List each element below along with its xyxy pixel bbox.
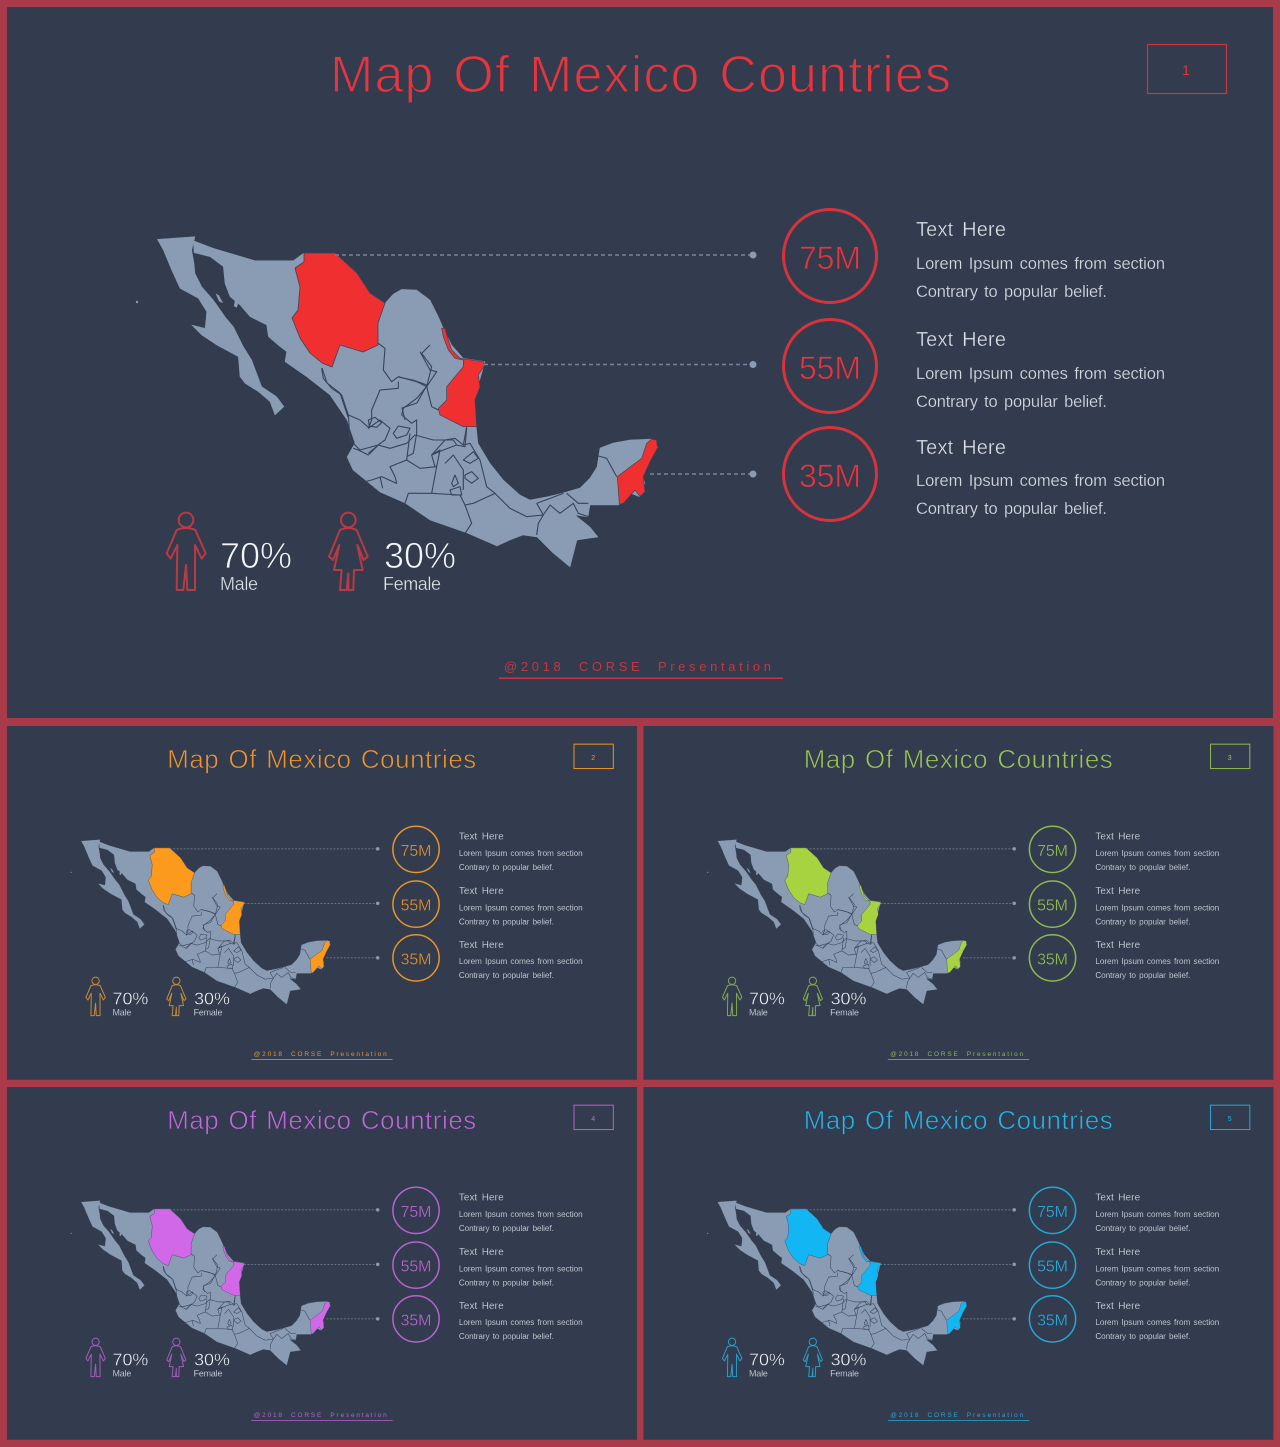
text block 1: Text Here bbox=[916, 219, 1006, 241]
stat 75M: 75M bbox=[1037, 1204, 1068, 1221]
stat 55M: 55M bbox=[799, 350, 861, 386]
panel: green slide bbox=[643, 726, 1273, 1080]
icon: female bbox=[167, 977, 186, 1016]
panel: orange slide bbox=[7, 726, 637, 1080]
female stat: Female bbox=[830, 1369, 859, 1379]
title: Map Of Mexico Countries bbox=[804, 746, 1113, 774]
panel: purple slide bbox=[7, 1087, 637, 1440]
male stat: Male bbox=[220, 574, 258, 594]
male stat bbox=[749, 1350, 785, 1379]
icon: female bbox=[803, 977, 822, 1016]
male stat: 70% bbox=[749, 989, 785, 1009]
female stat bbox=[194, 1350, 230, 1379]
stat 75M bbox=[1029, 826, 1076, 873]
stat 35M: 35M bbox=[799, 458, 861, 494]
map of Mexico bbox=[71, 840, 330, 1004]
text block 3: Text Here bbox=[1095, 1301, 1141, 1312]
slide number box: 1 bbox=[1182, 62, 1190, 78]
text block 3: Lorem Ipsum comes from section bbox=[1095, 957, 1220, 966]
stat 35M: 35M bbox=[401, 1312, 431, 1329]
female stat: Female bbox=[194, 1369, 222, 1379]
text block 3 bbox=[1095, 1301, 1220, 1341]
stat 35M bbox=[1029, 935, 1076, 981]
stat 75M: 75M bbox=[799, 240, 861, 276]
connector lines bbox=[170, 847, 379, 960]
slide number box: 2 bbox=[591, 755, 595, 762]
panel: main red slide bbox=[7, 7, 1273, 718]
text block 1 bbox=[916, 219, 1165, 301]
stat 55M bbox=[784, 320, 876, 412]
stat 35M bbox=[784, 428, 876, 520]
icon: female bbox=[167, 1338, 186, 1377]
male stat bbox=[220, 535, 292, 594]
text block 3 bbox=[459, 1301, 583, 1341]
text block 2: Text Here bbox=[459, 886, 504, 897]
text block 1 bbox=[459, 1192, 583, 1233]
text block 1 bbox=[1095, 1192, 1220, 1233]
icon: male bbox=[86, 1338, 105, 1377]
text block 3: Lorem Ipsum comes from section bbox=[459, 957, 583, 966]
male stat: 70% bbox=[112, 1350, 148, 1370]
male stat bbox=[112, 989, 148, 1018]
female stat bbox=[383, 535, 456, 594]
map of Mexico bbox=[707, 1201, 967, 1365]
text block 1 bbox=[459, 831, 583, 872]
text block 2: Lorem Ipsum comes from section bbox=[916, 365, 1165, 383]
text block 3: Contrary to popular belief. bbox=[459, 1332, 554, 1341]
female stat bbox=[194, 989, 230, 1018]
male stat bbox=[112, 1350, 148, 1379]
icon: female bbox=[329, 513, 368, 590]
slide number box bbox=[1211, 1105, 1250, 1130]
text block 3: Lorem Ipsum comes from section bbox=[1095, 1318, 1220, 1327]
text block 2: Text Here bbox=[916, 329, 1006, 351]
text block 2: Text Here bbox=[1095, 1247, 1141, 1258]
icon: male bbox=[722, 977, 742, 1016]
slide number box: 5 bbox=[1228, 1116, 1232, 1123]
map of Mexico bbox=[707, 840, 967, 1004]
male stat: 70% bbox=[749, 1350, 785, 1370]
slide number box bbox=[574, 1105, 613, 1130]
connector lines bbox=[806, 1208, 1016, 1321]
text block 3: Text Here bbox=[459, 940, 504, 951]
footer credit: @2018 CORSE Presentation bbox=[890, 1051, 1024, 1058]
text block 3: Text Here bbox=[459, 1301, 504, 1312]
stat 55M: 55M bbox=[401, 1259, 431, 1276]
text block 2 bbox=[1095, 1247, 1220, 1288]
stat 55M: 55M bbox=[1037, 1259, 1068, 1276]
male stat: 70% bbox=[220, 535, 292, 576]
stat 75M bbox=[784, 210, 876, 302]
text block 1: Lorem Ipsum comes from section bbox=[1095, 1210, 1220, 1219]
male stat: Male bbox=[112, 1369, 131, 1379]
text block 1: Lorem Ipsum comes from section bbox=[459, 849, 583, 858]
text block 3: Lorem Ipsum comes from section bbox=[916, 472, 1165, 490]
icon: male bbox=[722, 1338, 742, 1377]
stat 75M: 75M bbox=[401, 843, 431, 860]
stat 35M bbox=[1029, 1296, 1076, 1342]
stat 75M bbox=[393, 1187, 439, 1234]
map of Mexico bbox=[71, 1201, 330, 1365]
stat 55M bbox=[1029, 881, 1076, 927]
text block 3: Lorem Ipsum comes from section bbox=[459, 1318, 583, 1327]
text block 1: Contrary to popular belief. bbox=[459, 1224, 554, 1233]
female stat bbox=[830, 1350, 867, 1379]
male stat: 70% bbox=[112, 989, 148, 1009]
stat 35M bbox=[393, 935, 439, 981]
text block 2 bbox=[459, 886, 583, 927]
female stat: 30% bbox=[384, 535, 456, 576]
text block 3 bbox=[459, 940, 583, 980]
stat 35M: 35M bbox=[1037, 951, 1068, 968]
text block 1: Contrary to popular belief. bbox=[459, 863, 554, 872]
map of Mexico bbox=[136, 237, 658, 567]
male stat bbox=[749, 989, 785, 1018]
footer credit: @2018 CORSE Presentation bbox=[254, 1051, 387, 1058]
text block 1: Contrary to popular belief. bbox=[916, 283, 1107, 301]
icon: male bbox=[86, 977, 105, 1016]
connector lines bbox=[335, 252, 756, 478]
male stat: Male bbox=[749, 1008, 768, 1018]
text block 1: Text Here bbox=[459, 1192, 504, 1203]
slide number box bbox=[1211, 744, 1250, 769]
text block 3: Text Here bbox=[1095, 940, 1141, 951]
text block 1 bbox=[1095, 831, 1220, 872]
stat 35M: 35M bbox=[401, 951, 431, 968]
text block 1: Text Here bbox=[1095, 831, 1141, 842]
icon: female bbox=[803, 1338, 822, 1377]
text block 2: Lorem Ipsum comes from section bbox=[1095, 904, 1220, 913]
text block 1: Lorem Ipsum comes from section bbox=[459, 1210, 583, 1219]
slide number box: 4 bbox=[591, 1116, 595, 1123]
footer credit: @2018 CORSE Presentation bbox=[890, 1412, 1024, 1419]
stat 55M bbox=[393, 1242, 439, 1288]
text block 3: Contrary to popular belief. bbox=[1095, 1332, 1190, 1341]
female stat: 30% bbox=[831, 989, 867, 1009]
stat 55M: 55M bbox=[1037, 898, 1068, 915]
title: Map Of Mexico Countries bbox=[167, 1107, 476, 1135]
stat 35M bbox=[393, 1296, 439, 1342]
stat 75M bbox=[1029, 1187, 1076, 1234]
stat 55M: 55M bbox=[401, 898, 431, 915]
stat 55M bbox=[1029, 1242, 1076, 1288]
text block 2: Lorem Ipsum comes from section bbox=[459, 904, 583, 913]
title: Map Of Mexico Countries bbox=[167, 746, 476, 774]
text block 2: Text Here bbox=[459, 1247, 504, 1258]
female stat: 30% bbox=[194, 989, 230, 1009]
text block 2: Contrary to popular belief. bbox=[1095, 918, 1190, 927]
stat 75M: 75M bbox=[401, 1204, 431, 1221]
title: Map Of Mexico Countries bbox=[804, 1107, 1113, 1135]
text block 2: Contrary to popular belief. bbox=[1095, 1279, 1190, 1288]
female stat: Female bbox=[194, 1008, 222, 1018]
text block 2: Lorem Ipsum comes from section bbox=[459, 1265, 583, 1274]
text block 3: Contrary to popular belief. bbox=[1095, 971, 1190, 980]
text block 1: Contrary to popular belief. bbox=[1095, 1224, 1190, 1233]
male stat: Male bbox=[749, 1369, 768, 1379]
text block 1: Lorem Ipsum comes from section bbox=[916, 255, 1165, 273]
text block 3 bbox=[916, 437, 1165, 518]
text block 3 bbox=[1095, 940, 1220, 980]
text block 2 bbox=[916, 329, 1165, 411]
text block 2 bbox=[1095, 886, 1220, 927]
text block 2: Contrary to popular belief. bbox=[916, 393, 1107, 411]
slide number box bbox=[1148, 44, 1226, 94]
stat 75M bbox=[393, 826, 439, 873]
text block 3: Text Here bbox=[916, 437, 1006, 459]
footer credit: @2018 CORSE Presentation bbox=[254, 1412, 387, 1419]
stat 55M bbox=[393, 881, 439, 927]
text block 1: Contrary to popular belief. bbox=[1095, 863, 1190, 872]
female stat: 30% bbox=[194, 1350, 230, 1370]
female stat: 30% bbox=[831, 1350, 867, 1370]
text block 2: Lorem Ipsum comes from section bbox=[1095, 1265, 1220, 1274]
slide number box bbox=[574, 744, 613, 769]
connector lines bbox=[170, 1208, 379, 1321]
stat 35M: 35M bbox=[1037, 1312, 1068, 1329]
text block 2: Contrary to popular belief. bbox=[459, 918, 554, 927]
title: Map Of Mexico Countries bbox=[330, 46, 951, 104]
text block 2: Contrary to popular belief. bbox=[459, 1279, 554, 1288]
text block 1: Text Here bbox=[459, 831, 504, 842]
footer credit: @2018 CORSE Presentation bbox=[504, 659, 771, 674]
stat 75M: 75M bbox=[1037, 843, 1068, 860]
text block 1: Lorem Ipsum comes from section bbox=[1095, 849, 1220, 858]
icon: male bbox=[167, 513, 206, 590]
female stat: Female bbox=[830, 1008, 859, 1018]
text block 2: Text Here bbox=[1095, 886, 1141, 897]
panel: blue slide bbox=[643, 1087, 1273, 1440]
text block 3: Contrary to popular belief. bbox=[459, 971, 554, 980]
female stat: Female bbox=[383, 574, 441, 594]
text block 1: Text Here bbox=[1095, 1192, 1141, 1203]
connector lines bbox=[806, 847, 1016, 960]
female stat bbox=[830, 989, 867, 1018]
text block 2 bbox=[459, 1247, 583, 1288]
male stat: Male bbox=[112, 1008, 131, 1018]
text block 3: Contrary to popular belief. bbox=[916, 500, 1107, 518]
slide number box: 3 bbox=[1228, 755, 1232, 762]
